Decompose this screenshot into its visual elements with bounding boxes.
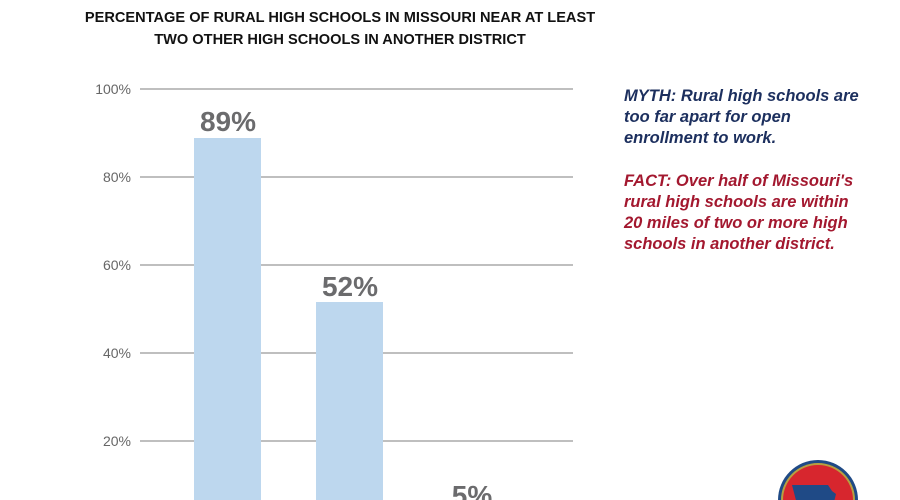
fact text: FACT: Over half of Missouri's rural high schools are within 20 miles of two or more high schools in another district. [624,172,853,253]
myth text: MYTH: Rural high schools are too far apart for open enrollment to work. [624,87,859,147]
bar chart: 100% [95,81,131,97]
title [85,10,595,48]
icon: logo seal [778,460,858,500]
title: PERCENTAGE OF RURAL HIGH SCHOOLS IN MISSOURI NEAR AT LEAST [85,10,595,26]
bar chart: 89% [200,106,256,137]
bar chart: 40% [103,345,131,361]
bar chart: 80% [103,169,131,185]
bar chart: 52% [322,271,378,302]
bar chart: 20% [103,433,131,449]
title: TWO OTHER HIGH SCHOOLS IN ANOTHER DISTRICT [154,32,526,48]
bar chart: 60% [103,257,131,273]
